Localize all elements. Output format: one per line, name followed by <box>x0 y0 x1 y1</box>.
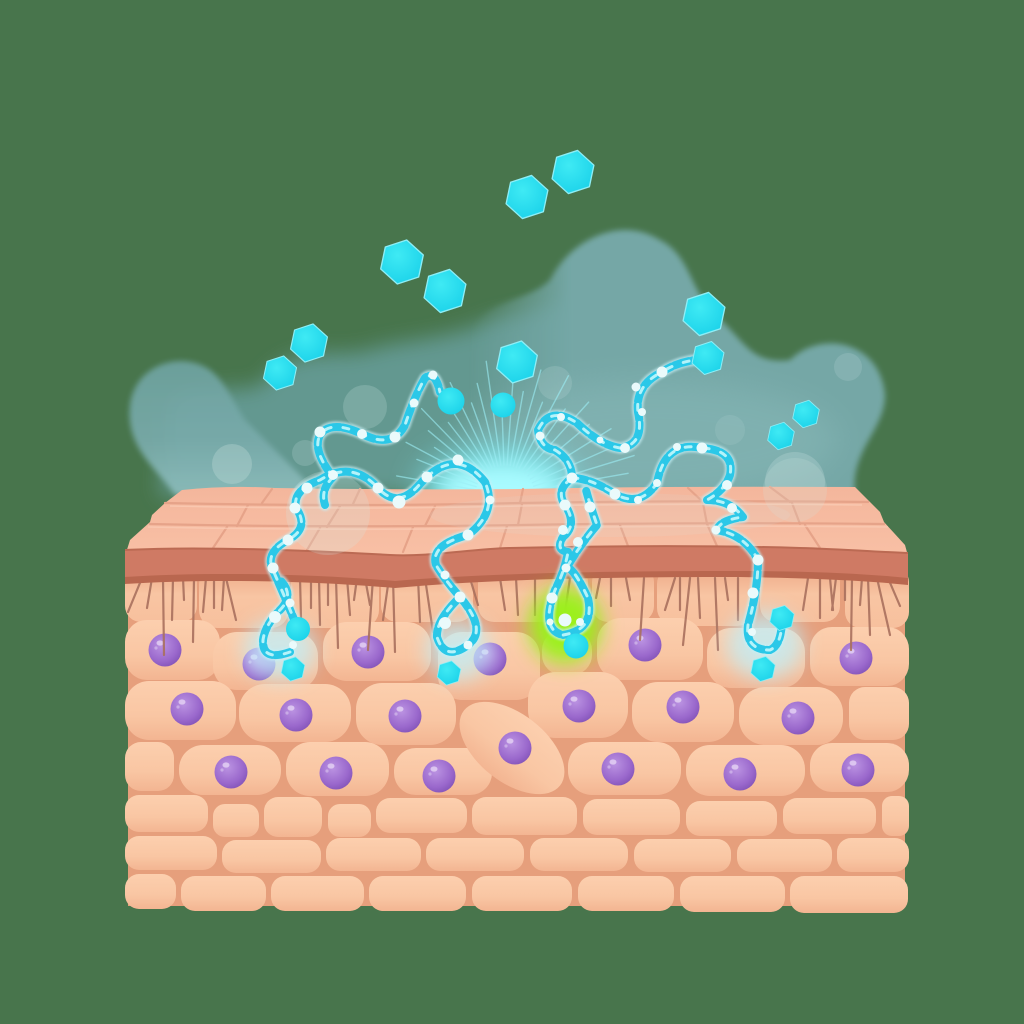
cell row 5 <box>125 836 217 870</box>
starburst rays <box>397 361 634 490</box>
chain beads right <box>536 366 764 636</box>
central glow <box>420 446 580 534</box>
cell row 2 <box>125 681 236 740</box>
skin surface <box>125 487 908 556</box>
surface highlight lines <box>148 504 888 529</box>
upper lumps under band <box>125 566 909 628</box>
hair-like roots <box>128 578 900 655</box>
cell row 3 <box>125 742 174 791</box>
surface haze overlays <box>286 458 827 555</box>
tissue cells <box>125 618 909 913</box>
lighter cloud base <box>460 380 840 500</box>
slanted cell <box>443 684 581 812</box>
chain beads left <box>268 370 494 650</box>
molecular chain: left strands <box>263 370 494 655</box>
blue cell glows <box>244 611 803 680</box>
round molecules <box>286 388 588 658</box>
surface divider lines <box>150 487 884 552</box>
green inflammation glow <box>529 587 601 663</box>
grout / tissue block <box>128 556 905 906</box>
cell row 6 <box>125 874 176 909</box>
molecular chain: right strands <box>536 359 782 650</box>
nuclei <box>148 628 874 792</box>
cloud bubbles <box>212 353 862 512</box>
dermal band <box>125 546 908 588</box>
cell row 4 <box>125 795 208 832</box>
vapour cloud <box>130 230 885 512</box>
floating hexagon molecules <box>263 150 819 685</box>
